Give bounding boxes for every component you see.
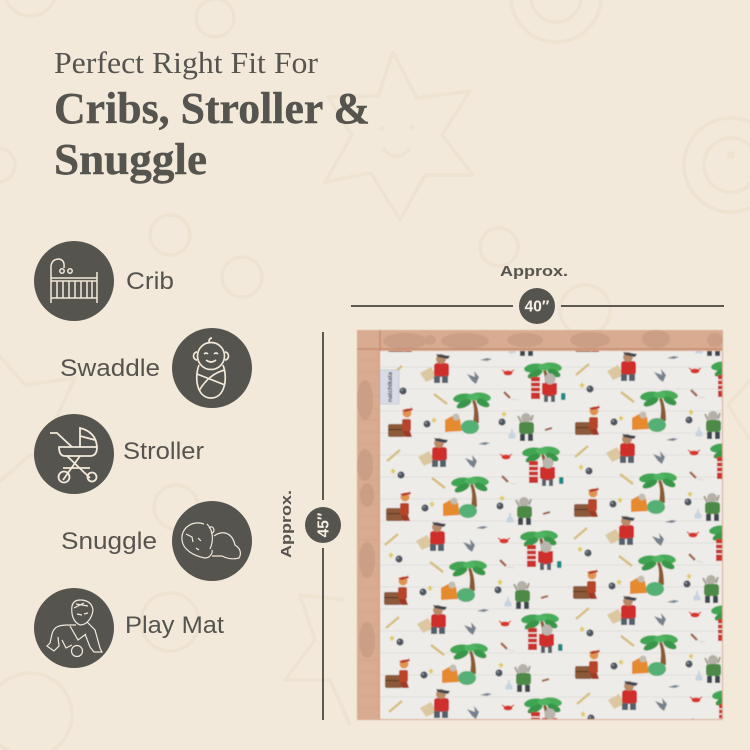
width label: Approx.	[500, 263, 568, 280]
width dimension	[351, 263, 724, 324]
title	[54, 45, 370, 184]
icon: swaddled baby	[194, 338, 229, 398]
swaddle item: Swaddle	[60, 355, 160, 382]
height line	[322, 332, 324, 720]
blanket border	[357, 330, 723, 720]
quilting wrinkles	[466, 477, 697, 698]
stroller item	[34, 414, 204, 494]
play mat item	[34, 588, 224, 668]
height label: Approx.	[278, 490, 295, 558]
title line one: Perfect Right Fit For	[54, 45, 319, 80]
title line three: Snuggle	[54, 135, 207, 184]
height dimension	[278, 332, 341, 720]
brand tag: natchikata	[388, 371, 394, 402]
snuggle item: Snuggle	[61, 528, 157, 555]
border mottling	[357, 330, 723, 658]
pirate print columns	[383, 350, 723, 720]
usage list	[34, 241, 252, 668]
crib item	[34, 241, 174, 321]
icon: stroller	[50, 428, 97, 482]
border seam lines	[357, 330, 722, 720]
swaddle item	[60, 328, 252, 408]
icon: crawling baby	[47, 600, 102, 656]
play mat item: Play Mat	[125, 612, 224, 639]
crib item: Crib	[126, 268, 174, 295]
width badge	[519, 288, 555, 324]
printed muslin panel	[379, 350, 723, 720]
height badge	[305, 507, 341, 543]
icon: sleeping baby	[182, 523, 240, 559]
height dimension: 45″	[316, 512, 332, 537]
stroller item: Stroller	[123, 438, 204, 465]
icon: crib	[51, 259, 97, 303]
title line two: Cribs, Stroller &	[54, 84, 370, 133]
blanket	[356, 330, 724, 720]
brand tag	[380, 370, 399, 404]
width dimension: 40″	[525, 298, 550, 316]
width line	[351, 305, 724, 307]
snuggle item	[61, 501, 252, 581]
